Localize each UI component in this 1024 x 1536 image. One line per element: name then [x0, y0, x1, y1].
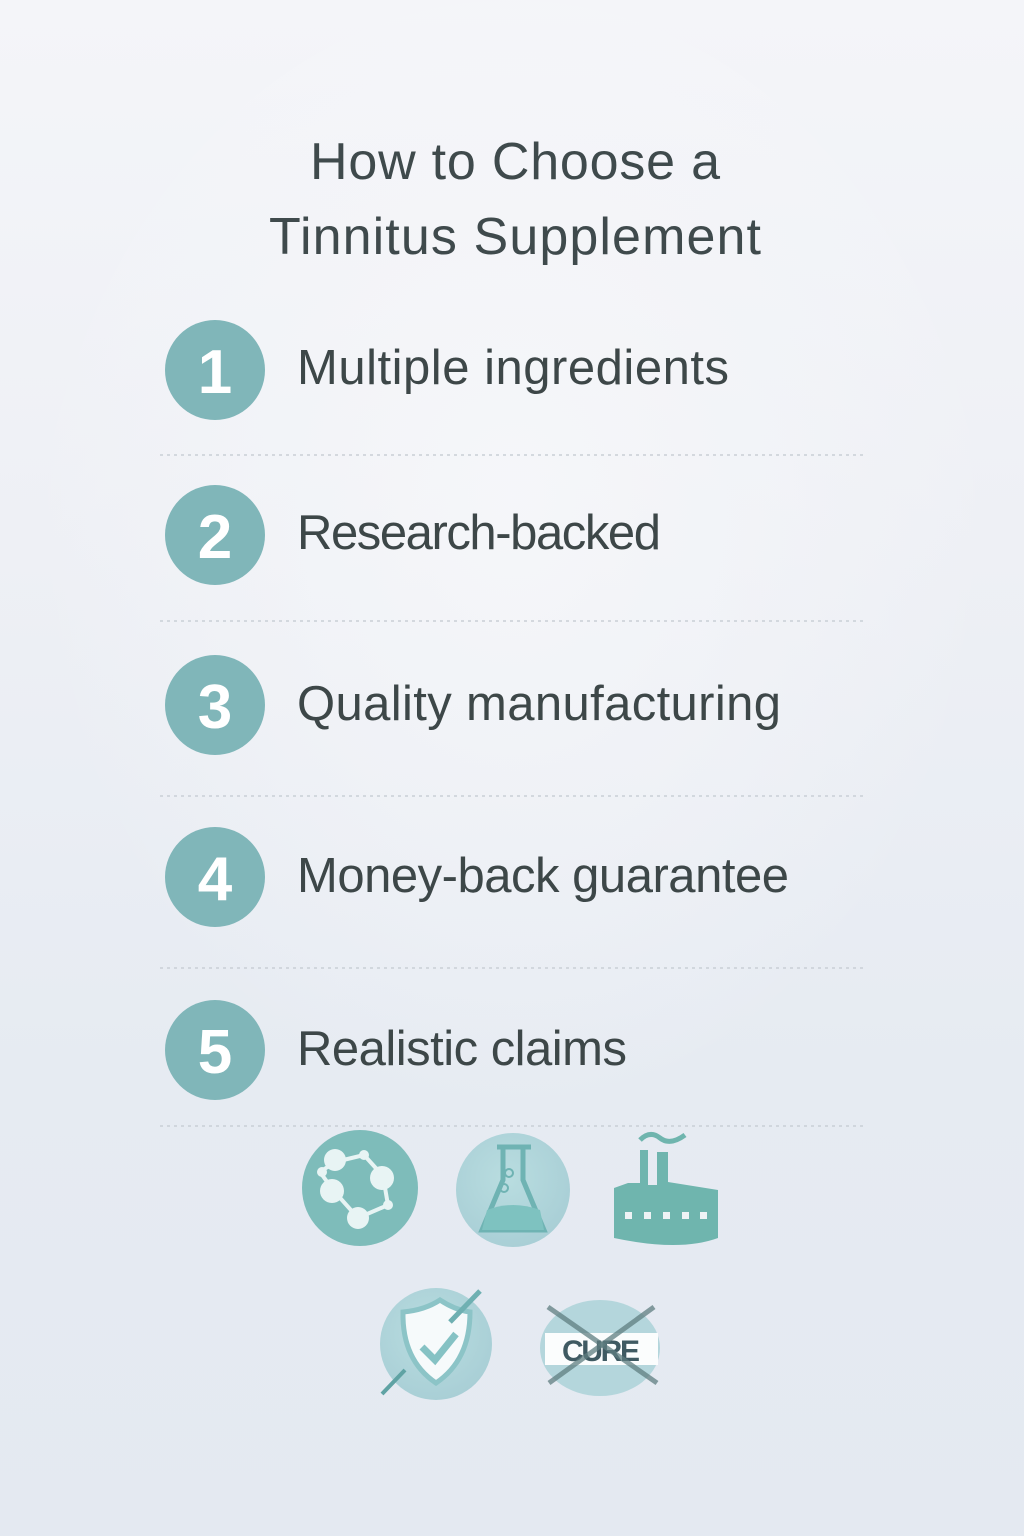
- item 1: 1: [198, 338, 232, 407]
- item 2: 2: [198, 503, 232, 572]
- icon: flask: [456, 1133, 570, 1247]
- item 3: Quality manufacturing: [297, 677, 781, 731]
- item 4: [165, 827, 789, 927]
- item 5: 5: [198, 1018, 232, 1087]
- item 5: [165, 1000, 627, 1100]
- item 4: 4: [198, 845, 233, 914]
- icon: cure crossed: [540, 1300, 660, 1396]
- icon: factory: [614, 1134, 718, 1245]
- item 5: Realistic claims: [297, 1022, 627, 1076]
- title: [269, 133, 762, 266]
- title: Tinnitus Supplement: [269, 208, 762, 266]
- icon: cure crossed: CURE: [562, 1335, 640, 1368]
- item 3: [165, 655, 781, 755]
- icon: molecule: [302, 1130, 418, 1246]
- item 4: Money-back guarantee: [297, 849, 789, 903]
- item 1: [165, 320, 729, 420]
- item 2: Research-backed: [297, 506, 661, 560]
- item 2: [165, 485, 661, 585]
- icon: shield: [380, 1288, 492, 1400]
- item 1: Multiple ingredients: [297, 341, 729, 395]
- item 3: 3: [198, 673, 232, 742]
- title: How to Choose a: [310, 133, 720, 191]
